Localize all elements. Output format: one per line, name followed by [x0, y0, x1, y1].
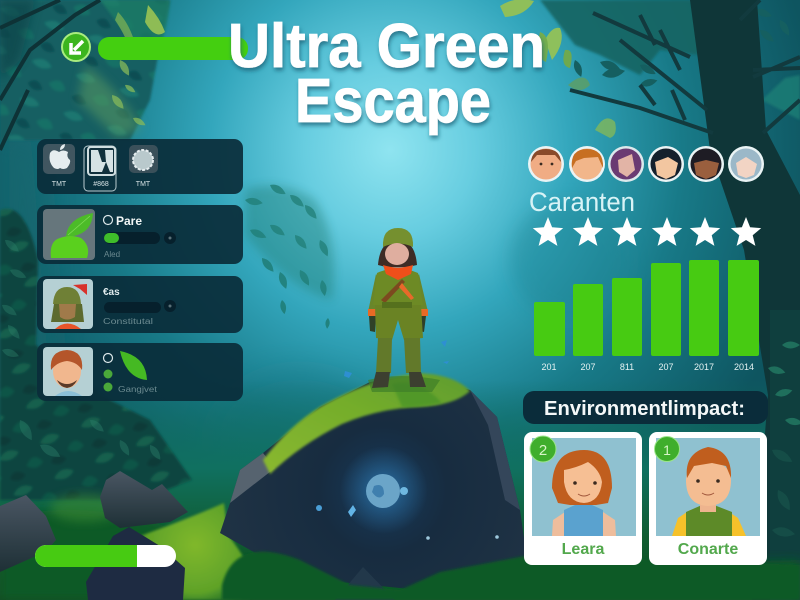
panel: ranger: Constitutal [103, 317, 153, 326]
card: Conarte [649, 432, 767, 565]
small rock: back pair [100, 471, 188, 528]
bar chart [534, 260, 759, 372]
arms [368, 274, 428, 314]
avatar 3 [608, 146, 644, 182]
avatar 6 [728, 146, 764, 182]
thumbnail: green apple [43, 209, 95, 260]
badge: number 1: 1 [663, 442, 671, 458]
card: Leara [524, 432, 642, 565]
title text: Escape [295, 67, 491, 136]
bottom progress bar [35, 545, 176, 567]
thumbnail: ranger portrait [43, 279, 93, 329]
grass base [0, 510, 800, 600]
title text [228, 12, 545, 136]
bar labels [541, 362, 754, 372]
avatar row [528, 146, 764, 182]
hazy foliage behind chart [510, 200, 630, 320]
title text: Ultra Green [228, 12, 545, 81]
bar labels: 201 [541, 362, 557, 372]
panel: Pare: Aled [104, 250, 120, 259]
icon: round tab: TMT [136, 181, 151, 188]
rating heading: Caranten [529, 187, 635, 217]
scarf [383, 265, 413, 280]
star rating [533, 217, 761, 246]
bar labels: 2017 [694, 362, 714, 372]
portrait: Leara [552, 450, 616, 536]
face [385, 243, 409, 265]
panel: leaf: Gangjvet [118, 385, 158, 394]
strap [381, 279, 405, 303]
grass foreground [222, 552, 800, 600]
avatar 4 [648, 146, 684, 182]
panel: icon tabs [37, 139, 243, 194]
panel: leaf [37, 343, 243, 401]
helmet [383, 228, 413, 247]
title [62, 12, 545, 136]
icon: leaf [120, 351, 147, 380]
moss on boulder [263, 373, 470, 474]
icon: apple tab [43, 144, 75, 188]
right tree trunk and branches [570, 0, 800, 600]
left lower foliage [0, 209, 192, 500]
icon: selected tab [84, 146, 116, 191]
small rock: left [0, 495, 56, 572]
bright grass patch [140, 503, 262, 600]
large boulder [220, 373, 528, 600]
green progress bar behind title [98, 37, 248, 60]
small rock: front [86, 527, 185, 600]
icon: apple tab: TMT [52, 181, 67, 188]
environment impact heading [523, 391, 768, 424]
panel: Pare [37, 205, 243, 264]
avatar 1 [528, 146, 564, 182]
panel: Pare: Pare [116, 214, 142, 228]
bar labels: 811 [620, 362, 634, 372]
thumbnail: boy portrait [43, 347, 93, 396]
glowing orb [316, 446, 499, 540]
top-left branches [0, 0, 100, 150]
legs [376, 338, 421, 373]
bar labels: 207 [580, 362, 596, 372]
boots [372, 372, 426, 388]
badge: number 2: 2 [539, 442, 547, 459]
environment impact heading: Environmentlimpact: [544, 398, 745, 420]
hair [378, 240, 417, 267]
belt [382, 302, 412, 308]
ranger character [344, 228, 449, 392]
card: Conarte: Conarte [678, 541, 738, 558]
torso [373, 268, 423, 305]
right lower foliage [767, 310, 800, 600]
bar labels: 207 [658, 362, 674, 372]
pants [375, 305, 423, 340]
panel: ranger: €as [103, 287, 120, 298]
icon: round tab [129, 145, 158, 188]
bar labels: 2014 [734, 362, 754, 372]
panel: ranger [37, 276, 243, 333]
top-right canopy [500, 0, 800, 138]
hazy foliage mid-left [244, 182, 334, 329]
portrait: Conarte [672, 447, 746, 536]
back badge icon [62, 33, 90, 61]
icon: selected tab: #868 [93, 181, 109, 188]
avatar 5 [688, 146, 724, 182]
avatar 2 [569, 146, 605, 182]
card: Leara: Leara [562, 541, 604, 558]
top-left canopy [0, 0, 170, 140]
